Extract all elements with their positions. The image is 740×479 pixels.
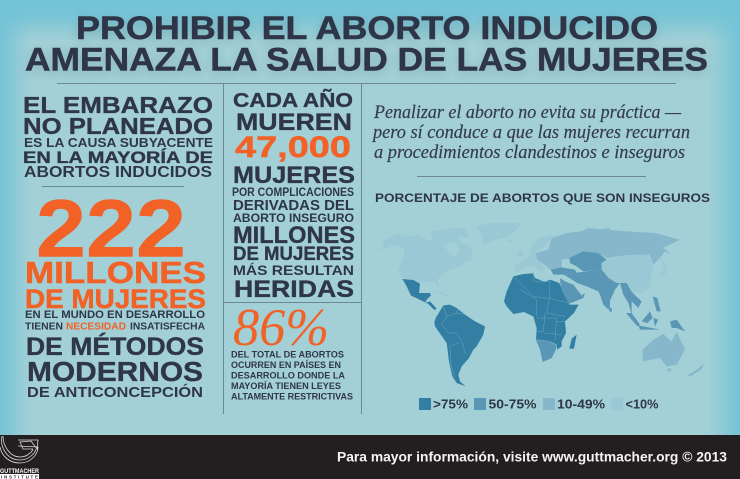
text: penalizar el aborto: a procedimientos clandestinos e inseguros — [374, 142, 685, 163]
text: mujeres por complicaciones: POR COMPLICACIONES — [232, 186, 354, 199]
big number: 86%: 86% — [233, 299, 329, 357]
logo: guttmacher institute: GUTTMACHER — [0, 469, 40, 475]
text: leyes restrictivas: MAYORÍA TIENEN LEYES — [231, 381, 341, 391]
title: PROHIBIR EL ABORTO INDUCIDO — [76, 10, 658, 46]
text: leyes restrictivas: DEL TOTAL DE ABORTOS — [231, 349, 344, 359]
text: necesidad insatisfecha: INSATISFECHA — [130, 321, 206, 332]
panel: muertes anuales — [232, 89, 355, 303]
text: penalizar el aborto: Penalizar el aborto no evita su práctica — — [373, 102, 681, 123]
text: cada año mueren: CADA AÑO — [233, 89, 353, 112]
text: leyes restrictivas: ALTAMENTE RESTRICTIVAS — [231, 392, 353, 402]
text: mujeres por complicaciones: ABORTO INSEGURO — [233, 213, 354, 225]
heading: el embarazo no planeado: EL EMBARAZO — [23, 92, 213, 118]
text: causa subyacente: EN LA MAYORÍA DE — [23, 148, 213, 167]
legend item: under 10 percent — [611, 396, 659, 412]
text: leyes restrictivas: DESARROLLO DONDE LA — [231, 370, 346, 380]
text: millones resultan heridas: MILLONES — [233, 222, 355, 249]
big number: 47,000: 47,000 — [235, 131, 351, 164]
text: métodos modernos de anticoncepción: DE ANTICONCEPCIÓN — [27, 383, 203, 401]
text: leyes restrictivas — [231, 349, 353, 402]
big number: 222 millones de mujeres: MILLONES — [25, 256, 206, 290]
text: cada año mueren — [233, 89, 353, 136]
text: millones resultan heridas: MÁS RESULTAN — [233, 262, 354, 278]
text: métodos modernos de anticoncepción: DE MÉTODOS — [26, 333, 204, 361]
heading: el embarazo no planeado: NO PLANEADO — [23, 113, 213, 139]
map: asia and oceania — [560, 228, 704, 376]
text: mujeres por complicaciones — [232, 162, 355, 225]
footer bar — [0, 435, 740, 479]
map: europe, africa and middle east — [504, 228, 610, 362]
heading: el embarazo no planeado — [23, 92, 213, 139]
text: necesidad insatisfecha — [25, 309, 206, 332]
text: millones resultan heridas — [233, 222, 355, 303]
legend item: under 10 percent: <10% — [626, 396, 659, 412]
world map — [375, 223, 704, 386]
text: causa subyacente: ABORTOS INDUCIDOS — [24, 164, 212, 181]
map: americas — [375, 223, 522, 386]
text: penalizar el aborto: pero sí conduce a que las mujeres recurran — [371, 122, 690, 143]
text: métodos modernos de anticoncepción — [26, 333, 204, 401]
heading: porcentaje de abortos inseguros: PORCENTAJE DE ABORTOS QUE SON INSEGUROS — [375, 191, 710, 205]
title — [25, 10, 708, 78]
text: millones resultan heridas: HERIDAS — [234, 276, 354, 303]
footer text: Para mayor información, visite www.guttmacher.org © 2013 — [337, 450, 727, 464]
panel: embarazo no planeado — [23, 92, 213, 401]
text: mujeres por complicaciones: DERIVADAS DEL — [233, 197, 354, 214]
text: necesidad insatisfecha: EN EL MUNDO EN DESARROLLO — [25, 309, 205, 321]
text: necesidad insatisfecha: TIENEN — [25, 321, 63, 332]
text: métodos modernos de anticoncepción: MODERNOS — [27, 356, 203, 387]
legend item: over 75 percent — [419, 396, 468, 412]
title: AMENAZA LA SALUD DE LAS MUJERES — [25, 42, 708, 78]
text: causa subyacente: ES LA CAUSA SUBYACENTE — [24, 135, 213, 150]
logo: guttmacher institute — [0, 436, 40, 479]
big number: 222 millones de mujeres: DE MUJERES — [25, 284, 206, 314]
legend item: 50 to 75 percent: 50-75% — [488, 396, 537, 412]
text: cada año mueren: MUEREN — [236, 109, 352, 136]
panel: 86 por ciento — [231, 299, 353, 402]
text: penalizar el aborto — [371, 102, 690, 163]
legend item: 10 to 49 percent: 10-49% — [557, 396, 605, 412]
text: causa subyacente — [23, 135, 213, 181]
big number: 222 millones de mujeres: 222 — [36, 184, 186, 274]
legend item: over 75 percent: >75% — [433, 396, 468, 412]
text: mujeres por complicaciones: MUJERES — [233, 162, 355, 189]
text: leyes restrictivas: OCURREN EN PAÍSES EN — [231, 360, 341, 370]
text: necesidad insatisfecha: NECESIDAD — [66, 321, 126, 332]
big number: 222 millones de mujeres — [25, 184, 206, 314]
text: millones resultan heridas: DE MUJERES — [233, 244, 354, 265]
legend — [419, 396, 659, 412]
